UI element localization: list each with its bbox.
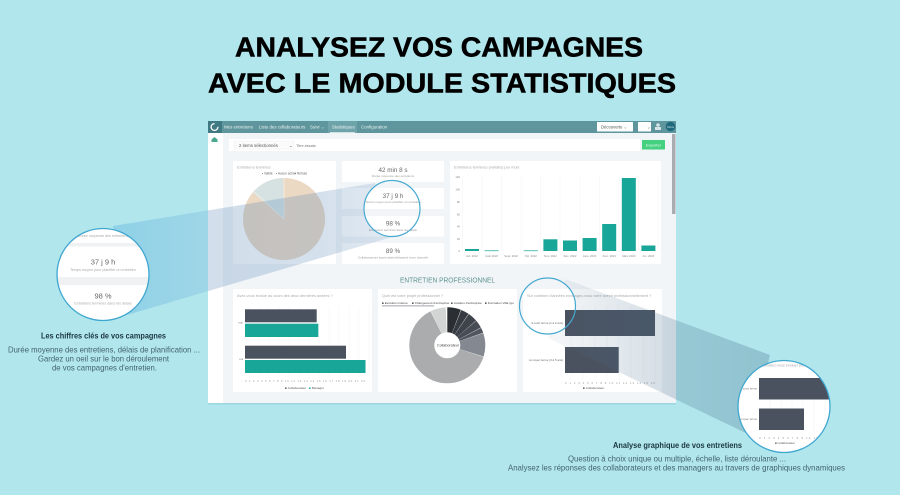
panel: entretiens par mois bar chart: 40: [457, 224, 460, 228]
panel: entretiens par mois bar chart: Mars 2023: [622, 254, 636, 258]
panel: projet professionnel donut: ■ Evolution interne: [382, 301, 408, 305]
filter bar: Titre.essais: [296, 143, 316, 148]
text block: chart analysis: [508, 441, 845, 473]
big lens: chart: à moyen terme: [738, 417, 757, 421]
navigation bar: [208, 121, 676, 133]
panel: évolution bar chart: 0 1 2 3 4 5 6 7 8 9 10 11 12 13 14 15 16 17 18 19 20 21 22: [245, 379, 366, 383]
panel: entretiens par mois bar chart: Déc. 2022: [564, 254, 577, 258]
panel: projet professionnel donut: Quel est votre projet professionnel ?: [382, 294, 443, 298]
panel: entretiens par mois bar chart: Juil. 2022: [466, 254, 478, 258]
text block: chart analysis: Analyse graphique de vos entretiens: [613, 441, 742, 450]
KPI: temps moyen: Temps moyen pour planifier un entretien: [365, 200, 421, 204]
icon: home: [212, 137, 218, 142]
panel: évolution bar chart: ■ Manager: [309, 386, 324, 390]
big lens: chart: 0 1 2 3 4 5 6 7 8 9 10 11 12: [759, 436, 825, 440]
panel: projet professionnel donut: [378, 289, 517, 392]
small lens: KPI: 98 %: [386, 220, 401, 228]
big lens: chart: souhaitez-vous évoluer professionnellement ?: [760, 364, 835, 368]
KPI: durée moyenne: 42 min 8 s: [378, 167, 408, 174]
panel: sur combien d'années bar chart: ■ Collaborateur: [583, 386, 604, 390]
panel: entretiens terminés pie: [233, 161, 336, 264]
export button: [642, 140, 665, 150]
panel: évolution bar chart: non: [238, 320, 243, 324]
donut chart: [422, 320, 473, 371]
sidebar: [208, 133, 223, 403]
navigation bar: Liste des collaborateurs: [259, 124, 306, 130]
panel: entretiens par mois bar chart: Nov. 2022: [544, 254, 557, 258]
beam: right magnifier: [548, 279, 770, 435]
KPI: durée moyenne: [342, 161, 444, 182]
panel: sur combien d'années bar chart: à moyen terme (3 à 5 ans): [529, 358, 563, 362]
text block: key figures: Gardez un oeil sur le bon déroulement: [38, 355, 170, 364]
section heading: ENTRETIEN PROFESSIONNEL: [400, 276, 495, 285]
text block: key figures: de vos campagnes d'entretien.: [52, 364, 157, 373]
navigation bar: Sirius: [667, 125, 675, 129]
panel: évolution bar chart: [233, 289, 372, 392]
navigation bar: Suivi ⌄: [310, 124, 324, 130]
filter bar: 2 items sélectionnés: [239, 143, 278, 148]
panel: entretiens par mois bar chart: 20: [457, 237, 460, 241]
text block: key figures: Durée moyenne des entretiens, délais de planification ...: [8, 346, 200, 354]
big lens: key figures: [57, 228, 149, 322]
panel: KPI cards: [342, 161, 444, 264]
big lens: key figures: 37 j 9 h: [91, 258, 115, 266]
scrollbar: [672, 134, 676, 214]
panel: projet professionnel donut: ■ Formation VAE (qu: [485, 301, 514, 305]
panel: entretiens par mois bar chart: Janv. 2023: [583, 254, 597, 258]
panel: sur combien d'années bar chart: 0 1 2 3 4 5 6 7 8 9 10 11 12 13 14 15 16: [565, 381, 656, 385]
text block: key figures: [8, 332, 200, 373]
KPI: temps moyen: [342, 188, 444, 209]
big lens: chart: ■ Collaborateur: [775, 441, 795, 445]
big lens: key figures: Temps moyen pour planifier un entretien: [70, 268, 136, 272]
text block: key figures: Les chiffres clés de vos campagnes: [41, 332, 166, 340]
panel: projet professionnel donut: ■ Changement d'entreprise: [412, 301, 450, 305]
small lens: KPI: Entretiens terminés dans les délais: [369, 228, 417, 232]
export button: Exporter: [646, 142, 662, 148]
panel: entretiens par mois bar chart: [450, 161, 661, 264]
big lens: key figures: Durée moyenne des entretiens: [78, 234, 128, 238]
KPI: durée moyenne: Durée moyenne des entretiens: [372, 174, 415, 178]
panel: entretiens par mois bar chart: Oct. 2022: [525, 254, 537, 258]
big lens: chart: [737, 360, 835, 452]
title: ANALYSEZ VOS CAMPAGNES: [235, 32, 643, 63]
panel: entretiens par mois bar chart: Avr. 2023: [643, 254, 655, 258]
panel: entretiens par mois bar chart: 100: [455, 188, 460, 192]
navigation bar: ⌄: [647, 124, 651, 129]
panel: entretiens terminés pie: • Aucun achat: [276, 172, 296, 176]
panel: entretiens par mois bar chart: Août 2022: [485, 254, 498, 258]
panel: évolution bar chart: oui: [239, 357, 243, 361]
navigation bar: Mes entretiens: [224, 124, 254, 130]
small lens: bar chart: [518, 277, 576, 335]
panel: entretiens terminés pie: • Validé: [262, 172, 273, 176]
big lens: key figures: 98 %: [94, 292, 112, 300]
panel: entretiens par mois bar chart: 60: [457, 212, 460, 216]
navigation bar: Configuration: [361, 124, 388, 130]
panel: sur combien d'années bar chart: à court terme (1 à 2 ans): [531, 321, 563, 325]
navigation bar: Statistiques: [332, 124, 356, 130]
panel: entretiens par mois bar chart: 0: [458, 249, 460, 253]
KPI: collaborateurs: [342, 243, 444, 264]
KPI: temps moyen: 37 j 9 h: [383, 193, 404, 200]
panel: sur combien d'années bar chart: [523, 289, 662, 392]
small lens: KPI: [363, 180, 421, 238]
title: [208, 32, 676, 99]
text block: chart analysis: Question à choix unique ou multiple, échelle, liste déroulante ...: [568, 455, 786, 464]
title: AVEC LE MODULE STATISTIQUES: [208, 68, 676, 99]
KPI: collaborateurs: Collaborateurs ayant atteint/dépassé leurs objectifs: [358, 256, 429, 260]
KPI: entretiens dans les délais: Entretiens terminés dans les délais: [369, 228, 417, 232]
panel: entretiens par mois bar chart: 120: [455, 175, 460, 179]
panel: sur combien d'années bar chart: Sur combien d'années envisagez-vous votre avenir professionnellement ?: [527, 294, 651, 298]
small lens: KPI: 37 j 9 h: [383, 193, 404, 200]
KPI: entretiens dans les délais: 98 %: [386, 220, 401, 228]
panel: entretiens terminés pie: • Refusé: [295, 172, 307, 176]
KPI: collaborateurs: 89 %: [386, 248, 401, 255]
pie chart: [264, 198, 304, 240]
panel: entretiens par mois bar chart: Févr. 2023: [603, 254, 616, 258]
dashboard window: [208, 121, 676, 404]
panel: entretiens par mois bar chart: Sept. 2022: [504, 254, 518, 258]
big lens: key figures: Entretiens terminés dans les délais: [74, 302, 132, 306]
small lens: bar chart: Sur combien d'années envisagez-vous: [527, 294, 592, 298]
panel: projet professionnel donut: ■ création d'entreprise: [451, 301, 482, 305]
navigation bar: Découverte ⌄: [601, 124, 627, 129]
big lens: chart: à court terme: [741, 386, 757, 390]
small lens: bar chart: à court terme (1 à 2 ans): [531, 321, 563, 325]
panel: entretiens par mois bar chart: 80: [457, 200, 460, 204]
filter bar: [229, 139, 640, 151]
panel: entretiens terminés pie: Entretiens terminés: [237, 164, 271, 170]
panel: évolution bar chart: ■ Collaborateur: [285, 386, 306, 390]
KPI: entretiens dans les délais: [342, 216, 444, 236]
panel: évolution bar chart: Avez-vous évolué au cours des deux dernières années ?: [237, 294, 333, 298]
beam: left magnifier: [113, 183, 392, 317]
text block: chart analysis: Analysez les réponses des collaborateurs et des managers au travers de graphiques dynamiques: [508, 464, 845, 473]
panel: entretiens par mois bar chart: Entretiens terminés (validés) par mois: [454, 164, 519, 170]
panel: projet professionnel donut: Collaborateur: [437, 344, 460, 348]
filter bar: ⌄: [289, 143, 293, 148]
small lens: KPI: Temps moyen pour planifier un entretien: [365, 200, 421, 204]
